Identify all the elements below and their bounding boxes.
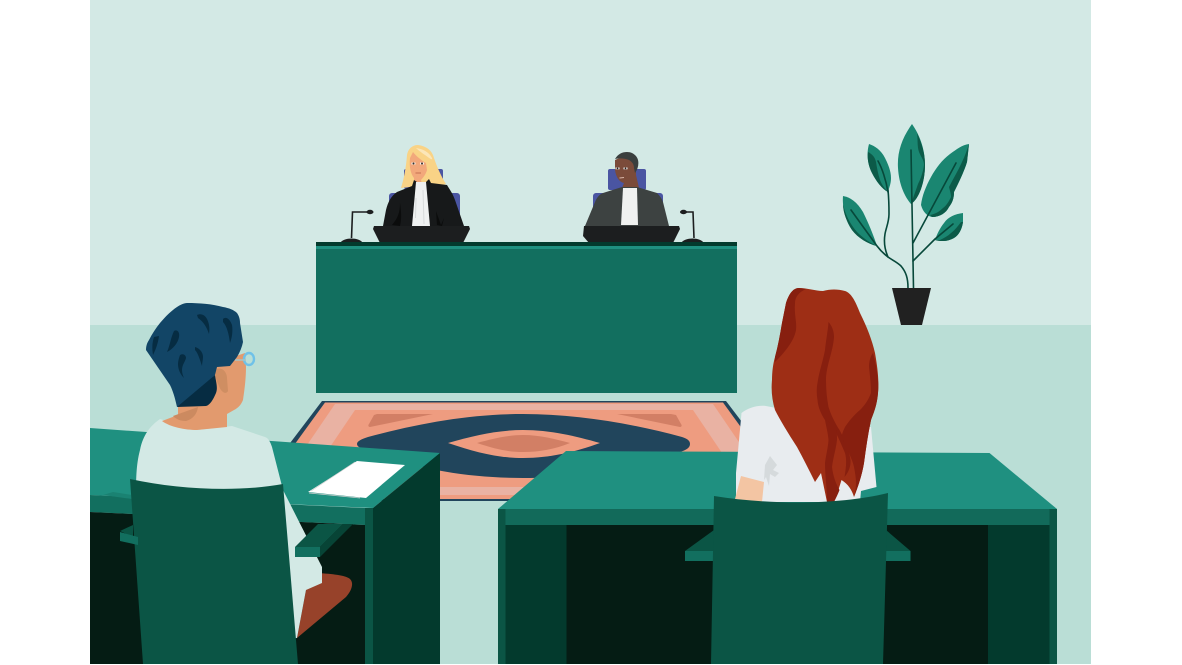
left desk (90, 428, 440, 664)
grey robe (585, 187, 669, 226)
chair back (711, 493, 888, 664)
lectern (373, 226, 470, 243)
right person (711, 288, 888, 664)
right tray (295, 524, 343, 547)
eyes (412, 162, 424, 164)
neck shadow (173, 407, 198, 421)
left desk trays (120, 524, 353, 557)
lectern (583, 226, 680, 243)
red hair (772, 288, 878, 502)
white jabot (621, 188, 638, 225)
chair back (130, 479, 298, 664)
hair strands (152, 314, 232, 378)
neck and face (162, 353, 246, 430)
plant leaves (843, 124, 969, 246)
left microphone (340, 210, 374, 243)
neck and face (615, 155, 639, 188)
jabot folds (416, 190, 424, 224)
rug dark eye (357, 414, 690, 478)
face (410, 152, 427, 184)
light shirt (136, 419, 322, 640)
judge chair (593, 169, 663, 227)
sleeve mark (764, 456, 779, 486)
blonde hair (401, 145, 446, 188)
right judge (583, 152, 680, 243)
arm (735, 476, 764, 502)
brown leg (297, 573, 352, 638)
white jabot (412, 182, 430, 226)
black robe (383, 179, 464, 226)
left judge (373, 145, 470, 243)
hair highlight (416, 148, 432, 159)
plant (843, 124, 969, 325)
hair (615, 152, 638, 173)
plant pot (892, 288, 931, 325)
robe folds (392, 203, 444, 226)
rug corner triangles (368, 414, 682, 427)
paper on desk (308, 461, 405, 498)
judges' bench (316, 242, 737, 393)
left tray (120, 525, 133, 537)
floor (90, 325, 1091, 664)
left person (130, 303, 352, 664)
rug salmon eye (448, 430, 600, 458)
right microphone (680, 210, 704, 243)
right desk trays (685, 530, 910, 561)
eyes (616, 168, 628, 169)
rug centre eye (477, 435, 570, 452)
white shirt (736, 406, 876, 502)
plant stems (851, 150, 956, 288)
hair shadow (177, 375, 217, 407)
glasses (235, 353, 254, 365)
right desk (498, 451, 1057, 664)
mouth (620, 176, 624, 179)
plant leaf shading (843, 133, 969, 246)
wall (90, 0, 1091, 325)
mouth (416, 172, 421, 174)
ear (216, 369, 228, 393)
hair shadows (775, 288, 878, 502)
hair (146, 303, 243, 407)
judge chair (389, 169, 460, 227)
rug (246, 401, 802, 501)
